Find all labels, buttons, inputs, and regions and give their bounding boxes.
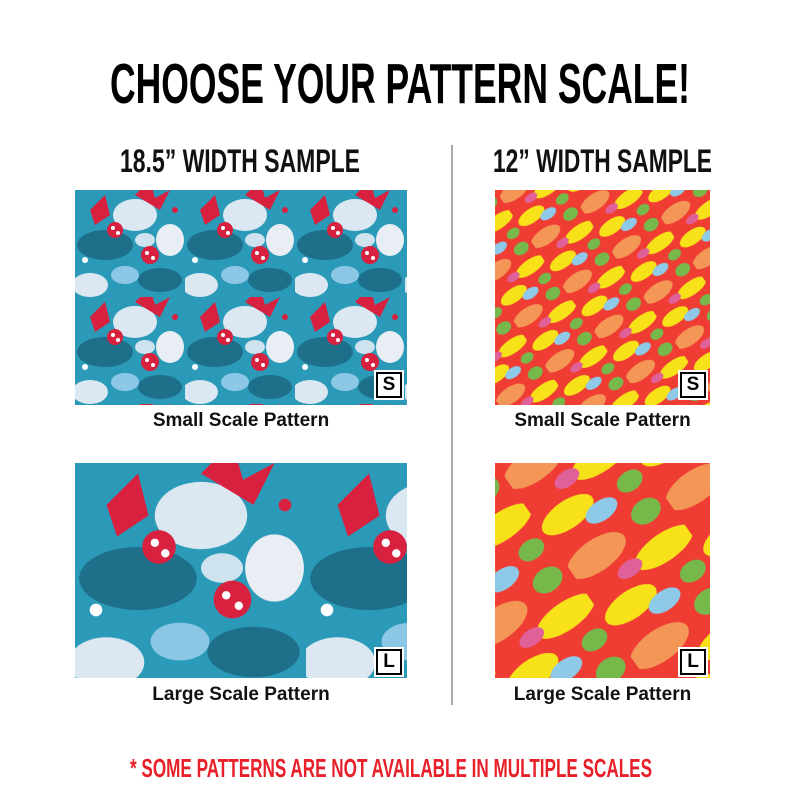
label: left large: Large Scale Pattern: [152, 684, 330, 705]
badge S: S: [687, 374, 699, 395]
label: right small: Small Scale Pattern: [514, 410, 691, 431]
label: right large: Large Scale Pattern: [514, 684, 691, 705]
divider: [451, 145, 453, 705]
subheading: 12 width: 12” WIDTH SAMPLE: [493, 143, 712, 179]
badge L: L: [687, 651, 699, 672]
panel: right large: [495, 463, 710, 678]
panel: left small: [75, 190, 407, 405]
badge S: [376, 372, 402, 398]
badge S: S: [383, 374, 395, 395]
subheading: 18.5 width: 18.5” WIDTH SAMPLE: [120, 143, 360, 179]
panel: left large: [75, 463, 407, 678]
label: left small: Small Scale Pattern: [153, 410, 329, 431]
badge L: L: [383, 651, 395, 672]
badge L: [376, 649, 402, 675]
panel: right small: [495, 190, 710, 405]
badge L: [680, 649, 706, 675]
badge S: [680, 372, 706, 398]
